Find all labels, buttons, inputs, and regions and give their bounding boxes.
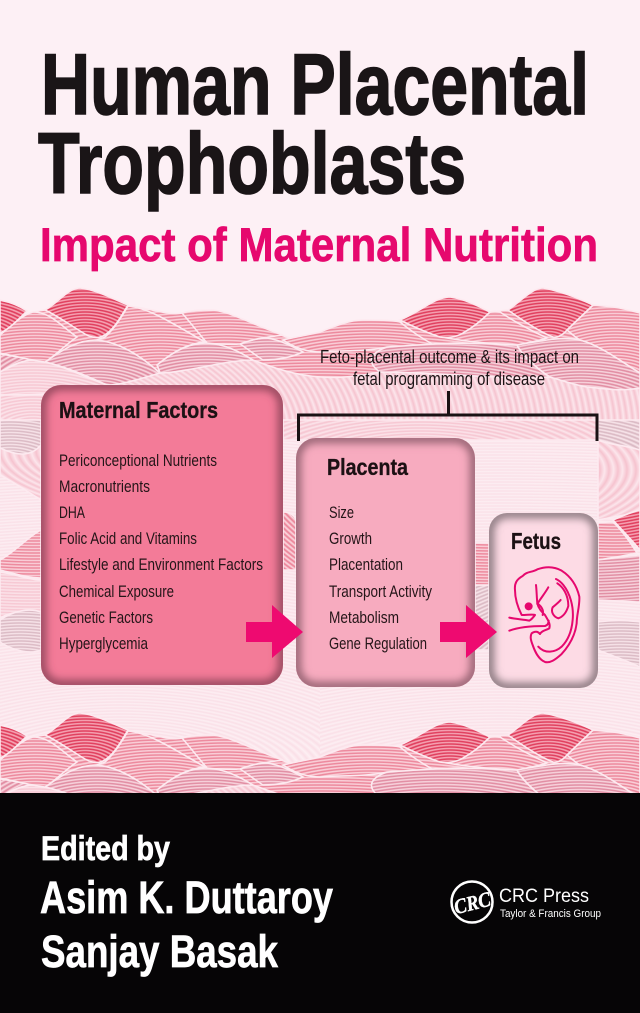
editors: Edited by bbox=[41, 830, 170, 868]
bracket bbox=[298, 391, 597, 441]
list: placenta bbox=[329, 504, 433, 653]
list: placenta: Size bbox=[329, 504, 354, 522]
icon: CRC circle: CRC bbox=[451, 887, 494, 919]
arrow: placenta to fetus bbox=[440, 605, 497, 658]
heading: maternal factors: Maternal Factors bbox=[59, 397, 218, 423]
title bbox=[38, 37, 589, 212]
list: maternal factors: DHA bbox=[59, 504, 85, 522]
editors bbox=[40, 830, 333, 977]
list: placenta: Gene Regulation bbox=[329, 635, 427, 653]
list: maternal factors: Folic Acid and Vitamins bbox=[59, 530, 197, 548]
title: Trophoblasts bbox=[38, 116, 466, 212]
editors: Asim K. Duttaroy bbox=[40, 872, 333, 923]
list: maternal factors: Chemical Exposure bbox=[59, 583, 174, 601]
icon: fetus bbox=[509, 567, 579, 662]
list: placenta: Growth bbox=[329, 530, 372, 548]
logo: CRC Press bbox=[451, 882, 601, 922]
heading: placenta: Placenta bbox=[327, 454, 408, 480]
wave pattern: middle band bbox=[0, 385, 640, 667]
panel: placenta bbox=[296, 438, 475, 687]
panel: maternal factors bbox=[41, 385, 283, 685]
list: maternal factors: Genetic Factors bbox=[59, 609, 153, 627]
wave pattern: lower band bbox=[0, 713, 640, 845]
panel: fetus bbox=[489, 513, 598, 688]
outcome label: fetal programming of disease bbox=[353, 369, 545, 389]
publisher group: Taylor & Francis Group bbox=[500, 908, 601, 920]
outcome label: Feto-placental outcome & its impact on bbox=[320, 347, 579, 367]
wave pattern: pale middle base bbox=[0, 350, 640, 793]
wave pattern: upper band bbox=[0, 288, 640, 420]
list: placenta: Metabolism bbox=[329, 609, 399, 627]
list: maternal factors: Hyperglycemia bbox=[59, 635, 149, 653]
publisher name: CRC Press bbox=[499, 886, 589, 907]
list: maternal factors: Macronutrients bbox=[59, 478, 150, 496]
list: maternal factors: Lifestyle and Environment Factors bbox=[59, 556, 263, 574]
arrow: maternal to placenta bbox=[246, 605, 303, 658]
list: maternal factors bbox=[59, 452, 263, 653]
footer band bbox=[0, 793, 640, 1013]
editors: Sanjay Basak bbox=[41, 926, 279, 977]
heading: fetus: Fetus bbox=[511, 528, 561, 554]
outcome label bbox=[320, 347, 579, 389]
list: placenta: Transport Activity bbox=[329, 583, 433, 601]
list: maternal factors: Periconceptional Nutrients bbox=[59, 452, 217, 470]
list: placenta: Placentation bbox=[329, 556, 403, 574]
